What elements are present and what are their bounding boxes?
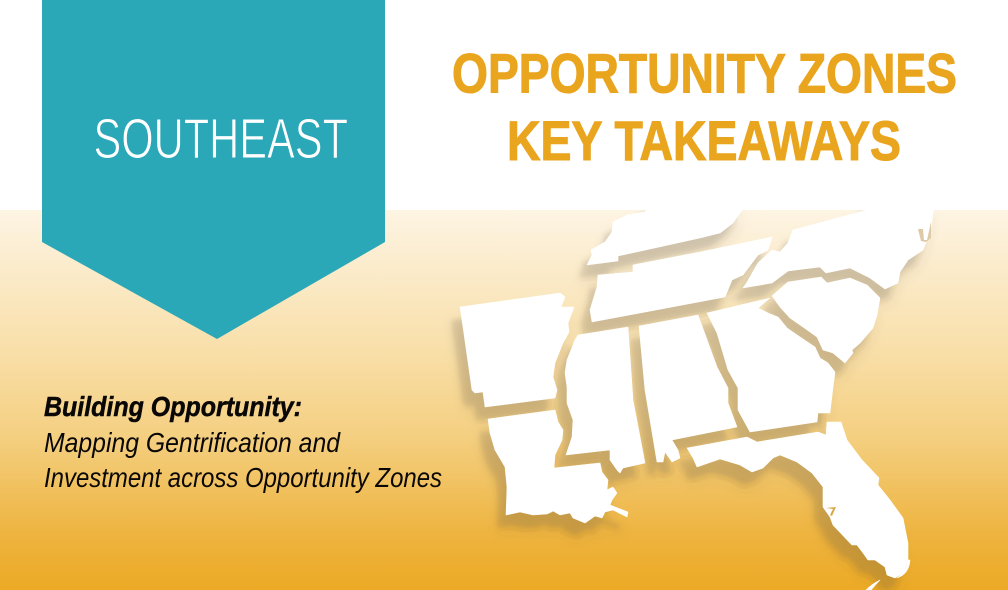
state: Florida bbox=[687, 422, 908, 578]
state: South Carolina bbox=[772, 277, 880, 363]
state: Tennessee bbox=[590, 237, 772, 322]
subtitle line 2: Mapping Gentrification and bbox=[44, 427, 341, 458]
banner label: SOUTHEAST bbox=[94, 107, 348, 171]
map of southeast states bbox=[460, 200, 935, 590]
subtitle line 3: Investment across Opportunity Zones bbox=[44, 462, 442, 493]
state: Georgia bbox=[707, 298, 835, 432]
banner shape bbox=[42, 0, 385, 339]
state: Virginia and North Carolina bbox=[743, 200, 935, 289]
state: Louisiana bbox=[488, 410, 628, 523]
state: Alabama bbox=[639, 315, 737, 462]
banner bbox=[42, 0, 385, 339]
Florida Keys bbox=[866, 560, 910, 590]
Tampa Bay detail bbox=[826, 507, 836, 516]
subtitle text block bbox=[44, 391, 442, 493]
title bbox=[452, 42, 957, 172]
state: Mississippi bbox=[565, 327, 645, 473]
map shadow bbox=[451, 213, 926, 590]
title line 2: KEY TAKEAWAYS bbox=[507, 109, 901, 172]
white top band bbox=[0, 0, 1008, 210]
Chesapeake Bay detail bbox=[918, 222, 931, 242]
gradient background bbox=[0, 210, 1008, 590]
state: Kentucky bbox=[587, 200, 742, 265]
state: Arkansas bbox=[460, 293, 574, 407]
subtitle bold line: Building Opportunity: bbox=[44, 391, 302, 422]
